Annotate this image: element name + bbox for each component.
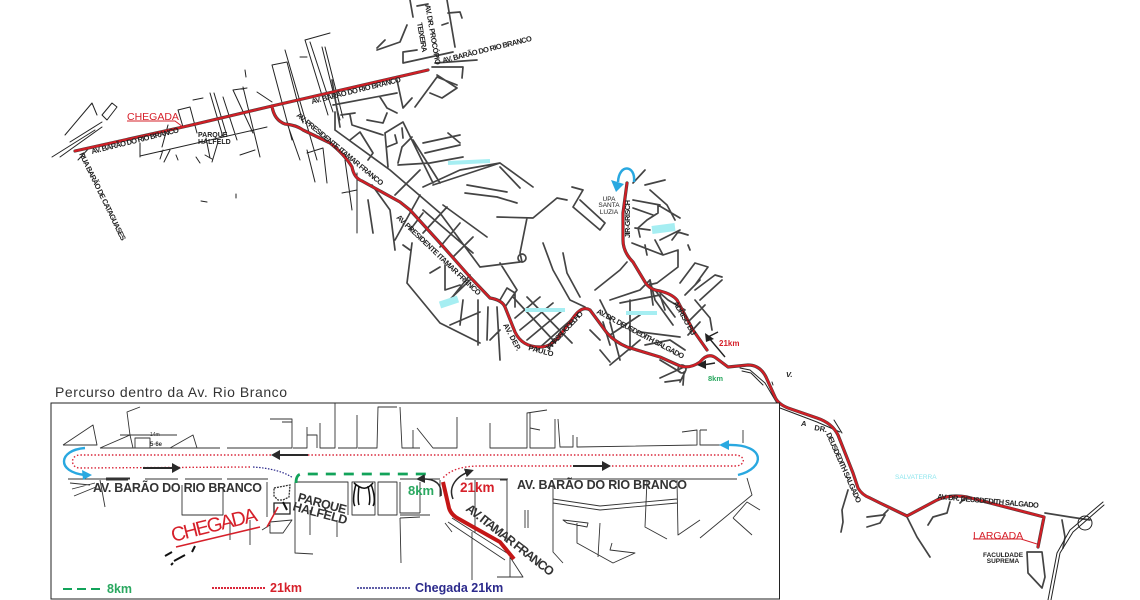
street names: DR.	[814, 423, 828, 434]
finish label: Chegada: CHEGADA	[127, 111, 179, 123]
route: thick red Av. Itamar Franco	[443, 482, 514, 559]
street names: AV. DEP.	[501, 322, 523, 352]
street names: AV. DR. PROCÓPIO	[423, 4, 443, 66]
inset street names: HALFELD	[291, 499, 349, 527]
inset distance labels: 21km	[460, 480, 495, 495]
blue turnaround arrow: right	[719, 440, 758, 475]
inset park and square details: 14m	[150, 432, 160, 438]
street names: RUA BARÃO DE CATAGUASES	[77, 151, 128, 242]
legend item: 8km	[63, 582, 132, 596]
route: 8km green dashed	[296, 474, 433, 483]
route: Chegada 21km navy dotted	[253, 467, 293, 478]
street names: AV. BARÃO DO RIO BRANCO	[310, 75, 402, 106]
curved arrow: 21km turn	[452, 471, 471, 499]
street network: west and centre	[52, 33, 722, 385]
street names: AV. PRESIDENTE ITAMAR FRANCO	[295, 111, 385, 188]
inset heading: Percurso dentro da Av. Rio Branco	[55, 384, 287, 400]
legend item: 21km: 21km	[270, 581, 302, 595]
curved arrow: 8km turn	[419, 479, 441, 496]
street names: AV. DR. DEUSDEDITH SALGADO	[595, 307, 686, 361]
inset park and square details	[150, 432, 374, 565]
landmark: Faculdade Suprema: SUPREMA	[987, 558, 1020, 565]
inset street names: AV. BARÃO DO RIO BRANCO	[93, 480, 262, 495]
legend	[63, 581, 503, 596]
inset finish label: Chegada: CHEGADA	[169, 504, 260, 547]
street names: JAPIASSU COELHO	[543, 309, 585, 353]
landmark: UPA Santa Luzia: UPA	[603, 196, 616, 203]
street names: AV. BARÃO DO RIO BRANCO	[90, 125, 180, 156]
neighbourhood labels in cyan: SALVATERRA	[895, 474, 937, 481]
blue turnaround arrow at UPA Santa Luzia	[611, 168, 634, 192]
direction arrow: eastbound right	[573, 461, 611, 471]
inset distance labels	[408, 480, 495, 498]
legend item: 21km	[212, 581, 302, 595]
route: 21km red dotted loop	[72, 455, 743, 478]
street names: V.	[786, 370, 792, 379]
neighbourhood labels in cyan	[440, 161, 937, 481]
street names: A	[800, 419, 806, 428]
landmark: UPA Santa Luzia: SANTA	[598, 202, 620, 209]
street names: JIR-GRISCH	[623, 200, 632, 238]
direction arrows with distance labels	[697, 332, 739, 383]
landmark: UPA Santa Luzia: LUZIA	[600, 209, 619, 216]
inset street names: PARQUE	[296, 490, 348, 517]
legend item: 8km: 8km	[107, 582, 132, 596]
street names: PAULO	[527, 343, 555, 359]
direction arrow: eastbound left	[143, 463, 181, 473]
street names: AV. DR. DEUSDEDITH SALGADO	[937, 492, 1039, 510]
landmark: Faculdade Suprema: FACULDADE	[983, 552, 1024, 559]
landmark: Parque Halfeld: HALFELD	[198, 139, 231, 146]
start label: Largada	[973, 530, 1037, 544]
street names: DEUSDEDITH SALGADO	[824, 431, 863, 504]
street names: TEIXEIRA	[415, 22, 429, 53]
street network: north and east	[377, 0, 1104, 600]
blue turnaround arrow: left	[64, 448, 92, 480]
finish label: Chegada	[127, 111, 183, 127]
direction arrows with distance labels: 21km	[719, 339, 739, 348]
street names: AV. BARÃO DO RIO BRANCO	[441, 34, 533, 65]
inset street blocks	[63, 403, 760, 580]
start label: Largada: LARGADA	[973, 530, 1023, 542]
inset park and square details: 5·6e	[150, 442, 163, 448]
inset distance labels: 8km	[408, 483, 434, 498]
street names	[77, 4, 1039, 510]
legend item: Chegada 21km: Chegada 21km	[415, 581, 503, 595]
street names: ADRISO BIJ	[671, 300, 698, 337]
inset street names: AV. ITAMAR FRANCO	[463, 501, 557, 579]
direction arrows with distance labels: 8km	[708, 374, 723, 383]
main route in red	[75, 70, 1044, 547]
street names: AV. PRESIDENTE ITAMAR FRANCO	[395, 213, 483, 297]
landmark: Parque Halfeld: PARQUE	[198, 132, 228, 139]
panel: inset of Av. Rio Branco	[51, 403, 780, 599]
inset street names: AV. BARÃO DO RIO BRANCO	[517, 477, 687, 492]
inset street names	[93, 477, 687, 579]
direction arrow: westbound	[271, 450, 308, 460]
